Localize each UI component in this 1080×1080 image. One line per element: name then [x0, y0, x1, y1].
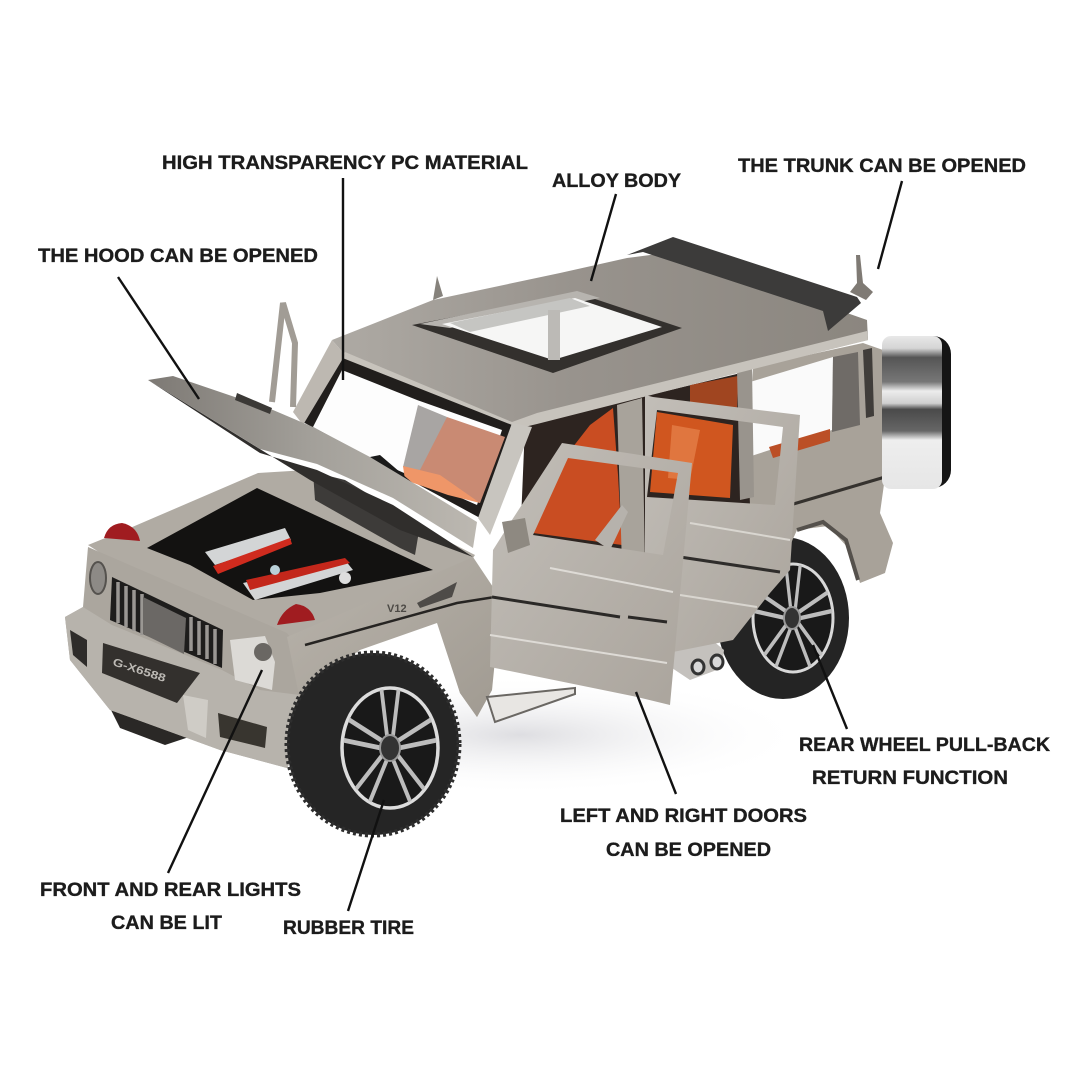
front fascia: G-X6588 [111, 656, 167, 685]
rear wheel [717, 537, 849, 699]
label: the trunk can be opened: THE TRUNK CAN BE OPENED [738, 156, 1026, 177]
front door [490, 443, 692, 705]
A pillars [293, 340, 345, 425]
label: the trunk can be opened [738, 156, 1026, 269]
rear side window [740, 348, 874, 458]
label: left and right doors can be opened: LEFT AND RIGHT DOORS [560, 806, 807, 827]
roof [332, 237, 868, 430]
ground shadow [230, 675, 810, 795]
sunroof [412, 291, 682, 373]
front fender: V12 [387, 603, 407, 615]
license plate [102, 643, 200, 703]
red lights [104, 523, 315, 625]
under-car dark [105, 698, 195, 745]
label: rear wheel pull-back return function: REAR WHEEL PULL-BACK [799, 735, 1050, 756]
windshield [303, 357, 512, 518]
label: alloy body [552, 171, 681, 281]
side interior [520, 367, 754, 565]
bumper vents [70, 630, 87, 667]
headlights [90, 562, 106, 594]
rear quarter body [745, 343, 893, 590]
label: front and rear lights can be lit: CAN BE LIT [111, 913, 222, 934]
roof rack [627, 237, 861, 331]
label: the hood can be opened [38, 246, 318, 399]
label: alloy body: ALLOY BODY [552, 171, 681, 192]
label: front and rear lights can be lit [40, 670, 301, 934]
label: rubber tire: RUBBER TIRE [283, 918, 414, 939]
label: rear wheel pull-back return function [799, 645, 1050, 789]
hood surround [88, 470, 475, 637]
rear antenna [850, 255, 873, 300]
label: left and right doors can be opened [560, 692, 807, 861]
front antenna hinge [272, 303, 295, 407]
spare wheel [882, 336, 951, 489]
side step [487, 688, 575, 722]
label: rubber tire [283, 800, 414, 939]
side body behind fender [437, 590, 495, 717]
front fender [287, 557, 520, 727]
front fascia [65, 547, 310, 768]
label: rear wheel pull-back return function: RETURN FUNCTION [812, 768, 1008, 789]
label: left and right doors can be opened: CAN BE OPENED [606, 840, 771, 861]
label: high transparency PC material: HIGH TRANSPARENCY PC MATERIAL [162, 153, 528, 174]
label: the hood can be opened: THE HOOD CAN BE OPENED [38, 246, 318, 267]
front wheel [287, 653, 459, 835]
open hood [148, 376, 477, 557]
exhaust pipes [672, 640, 724, 680]
rear door [645, 395, 800, 652]
label: front and rear lights can be lit: FRONT AND REAR LIGHTS [40, 880, 301, 901]
roof antenna [433, 276, 443, 300]
engine bay [147, 472, 433, 600]
car model [65, 237, 951, 835]
grille [110, 577, 223, 668]
